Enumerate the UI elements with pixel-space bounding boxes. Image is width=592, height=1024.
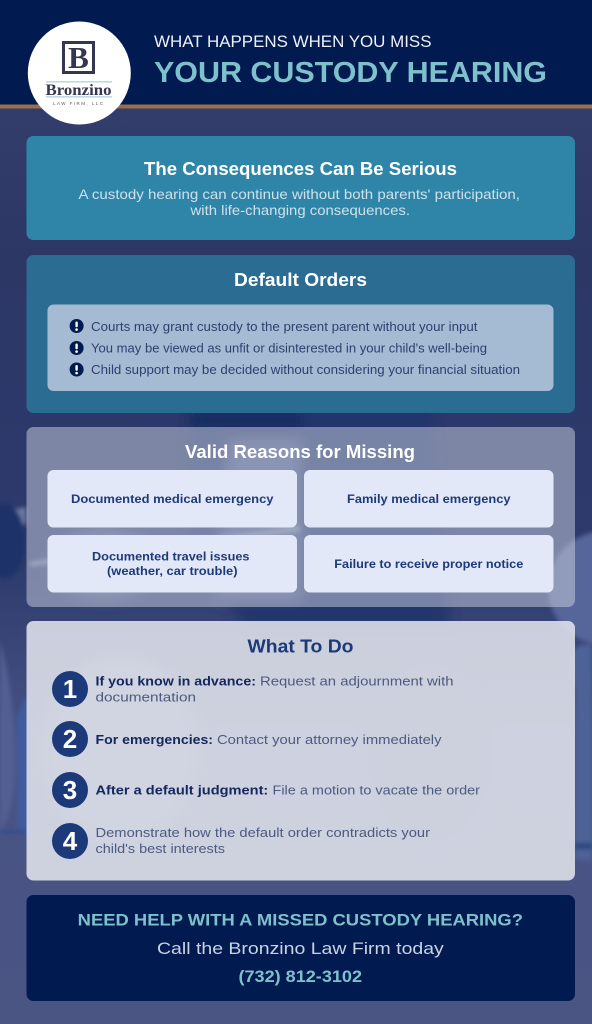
list box xyxy=(48,304,554,391)
tile: documented travel issues xyxy=(48,535,297,592)
tile: failure to receive proper notice: Failure to receive proper notice xyxy=(334,559,523,571)
step 3: File a motion to vacate the order xyxy=(272,783,481,798)
heading: valid reasons: Valid Reasons for Missing xyxy=(185,442,415,462)
panel: the consequences can be serious: The Consequences Can Be Serious xyxy=(144,159,457,179)
logo xyxy=(28,22,131,124)
heading: default orders: Default Orders xyxy=(234,270,367,290)
panel: default orders xyxy=(26,255,575,413)
tile: family medical emergency xyxy=(304,470,554,528)
step 2: Contact your attorney immediately xyxy=(217,732,442,747)
panel: the consequences can be serious: with life-changing consequences. xyxy=(189,202,410,218)
step 4: child's best interests xyxy=(96,841,226,856)
panel: valid reasons for missing xyxy=(26,427,575,607)
panel: what to do xyxy=(26,621,575,880)
step 4 xyxy=(52,823,431,859)
step 4: Demonstrate how the default order contradicts your xyxy=(96,825,431,840)
step 1: Request an adjournment with xyxy=(260,674,454,689)
list box: Courts may grant custody to the present parent without your input xyxy=(91,320,478,334)
tile: family medical emergency: Family medical emergency xyxy=(347,494,511,506)
logo: LAW FIRM, LLC xyxy=(53,101,104,106)
title: YOUR CUSTODY HEARING xyxy=(154,57,547,89)
tile: failure to receive proper notice xyxy=(304,535,554,592)
title: WHAT HAPPENS WHEN YOU MISS xyxy=(154,32,432,51)
icon: alert 2 xyxy=(70,341,84,355)
tile: documented travel issues: (weather, car trouble) xyxy=(107,566,238,578)
logo: Bronzino xyxy=(46,82,112,99)
icon: alert 1 xyxy=(70,319,84,333)
list box: Child support may be decided without considering your financial situation xyxy=(91,363,520,377)
list box: You may be viewed as unfit or disinterested in your child's well-being xyxy=(91,342,487,356)
heading: what to do: What To Do xyxy=(248,637,354,657)
panel: the consequences can be serious: A custody hearing can continue without both parents' participation, xyxy=(78,186,520,202)
logo mark: B xyxy=(68,40,89,75)
panel: call to action: Call the Bronzino Law Firm today xyxy=(157,939,444,958)
step 2: 2 xyxy=(63,724,77,754)
step 4: 4 xyxy=(63,826,78,856)
tile: documented travel issues: Documented travel issues xyxy=(92,552,250,564)
tile: documented medical emergency: Documented medical emergency xyxy=(71,494,274,506)
step 1 xyxy=(52,671,454,707)
step 1: 1 xyxy=(63,674,77,704)
header band xyxy=(0,0,592,108)
step 1: If you know in advance: xyxy=(96,674,256,689)
step 3: 3 xyxy=(63,775,77,805)
step 1: documentation xyxy=(96,690,196,705)
title xyxy=(154,32,547,89)
panel: call to action: NEED HELP WITH A MISSED CUSTODY HEARING? xyxy=(78,911,523,930)
step 2: For emergencies: xyxy=(96,732,213,747)
step 3 xyxy=(52,772,481,808)
step 3: After a default judgment: xyxy=(96,783,268,798)
tile: documented medical emergency xyxy=(48,470,297,528)
icon: alert 3 xyxy=(70,362,84,376)
step 2 xyxy=(52,721,442,757)
panel: the consequences can be serious xyxy=(26,136,575,240)
panel: call to action: (732) 812-3102 xyxy=(238,967,362,986)
panel: call to action xyxy=(26,895,575,1001)
